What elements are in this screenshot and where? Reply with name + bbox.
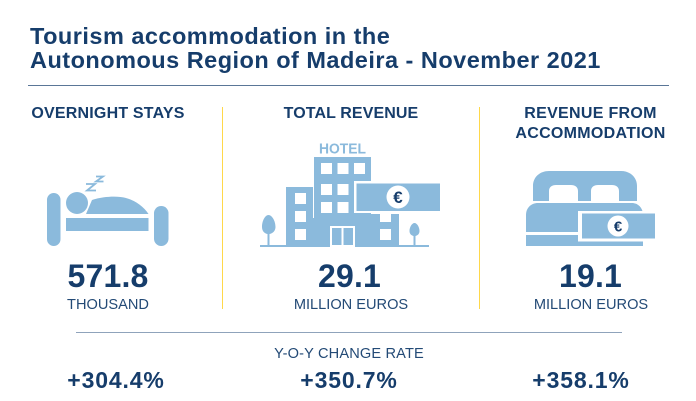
heading: overnight stays: OVERNIGHT STAYS — [31, 105, 185, 122]
title — [30, 23, 601, 73]
title: Autonomous Region of Madeira - November 2021 — [30, 47, 601, 73]
icon: sleeping person in bed — [47, 176, 168, 246]
icon: double bed with banknote: € — [614, 218, 623, 236]
rate: overnight stays: +304.4% — [67, 367, 165, 393]
heading: revenue from accommodation: REVENUE FROM — [524, 105, 657, 122]
heading: revenue from accommodation — [515, 105, 666, 142]
label: y-o-y change rate: Y-O-Y CHANGE RATE — [274, 346, 424, 362]
rate: revenue from accommodation: +358.1% — [532, 367, 630, 393]
unit: million euros: MILLION EUROS — [534, 297, 648, 313]
value: total revenue: 29.1 — [318, 258, 381, 294]
unit: thousand: THOUSAND — [67, 297, 149, 313]
heading: revenue from accommodation: ACCOMMODATION — [515, 125, 666, 142]
title: Tourism accommodation in the — [30, 23, 390, 49]
unit: million euros: MILLION EUROS — [294, 297, 408, 313]
rate: total revenue: +350.7% — [300, 367, 398, 393]
icon: hotel with banknote: € — [393, 188, 403, 207]
icon: hotel with banknote: HOTEL — [319, 142, 366, 158]
icon: double bed with banknote — [526, 171, 656, 246]
value: overnight stays: 571.8 — [67, 258, 149, 294]
value: revenue from accommodation: 19.1 — [559, 258, 622, 294]
icon: hotel with banknote — [260, 142, 441, 247]
heading: total revenue: TOTAL REVENUE — [284, 105, 418, 122]
